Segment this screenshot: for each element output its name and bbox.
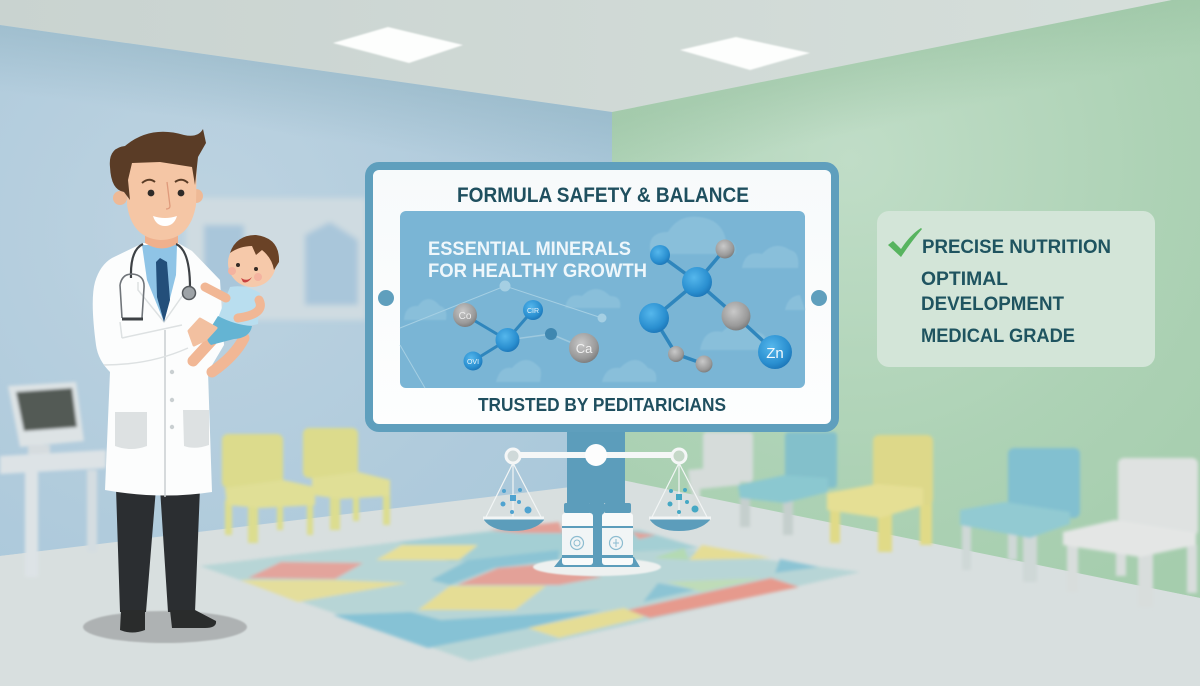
podium ellipse	[533, 558, 661, 576]
molecule left: OVI	[467, 359, 479, 366]
bottle left	[562, 503, 593, 565]
doctor holding baby	[83, 129, 279, 643]
right pan	[649, 463, 711, 531]
shirt and tie	[142, 245, 177, 322]
screen heading	[428, 238, 647, 282]
face	[127, 150, 197, 240]
molecule right: Zn	[766, 345, 784, 362]
molecule left: Ca	[576, 341, 593, 356]
benefits panel	[877, 211, 1155, 367]
panel background	[877, 211, 1155, 367]
wall art	[186, 198, 366, 320]
doctor hand	[189, 319, 216, 345]
balance scale with formula bottles	[483, 430, 711, 576]
monitor heading: FORMULA SAFETY & BALANCE	[457, 184, 749, 207]
monitor panel	[369, 166, 835, 428]
waiting room chairs	[222, 428, 1198, 607]
coat pockets	[115, 410, 209, 449]
molecule left: Co	[459, 311, 472, 322]
molecule left	[453, 300, 599, 370]
trousers	[116, 488, 200, 612]
baby shorts	[207, 316, 252, 345]
screen heading: ESSENTIAL MINERALS	[428, 238, 631, 260]
benefit text	[921, 236, 1111, 347]
baby arms	[205, 287, 260, 318]
left pan	[483, 463, 544, 531]
eyes and brows	[142, 180, 188, 209]
monitor stand	[554, 430, 640, 567]
neck	[145, 226, 178, 248]
computer desk	[0, 382, 106, 577]
molecule right	[639, 240, 792, 372]
ceiling lights	[333, 27, 810, 70]
colourful geometric rug	[200, 522, 860, 661]
monitor footer text: TRUSTED BY PEDITARICIANS	[478, 394, 726, 415]
benefit text: OPTIMAL	[921, 268, 1008, 290]
molecule left: CIR	[527, 308, 539, 315]
monitor frame	[369, 166, 835, 428]
benefit text: DEVELOPMENT	[921, 293, 1064, 315]
scale beam	[506, 444, 686, 466]
smile	[153, 216, 177, 226]
benefit text: PRECISE NUTRITION	[922, 236, 1111, 258]
floor shadow	[83, 611, 247, 643]
baby	[193, 235, 279, 372]
screen heading: FOR HEALTHY GROWTH	[428, 260, 647, 282]
faint network lines	[400, 280, 606, 388]
baby shirt	[218, 286, 260, 326]
lab coat	[93, 243, 224, 496]
monitor side dots	[378, 290, 827, 306]
baby head	[228, 235, 279, 287]
benefit text: MEDICAL GRADE	[921, 325, 1075, 347]
bottle right	[602, 503, 633, 565]
clouds	[404, 217, 805, 382]
mineral screen	[400, 211, 805, 388]
coat seam and buttons	[104, 282, 190, 497]
stethoscope	[120, 244, 196, 319]
shoes	[120, 610, 216, 632]
icon: green check	[888, 228, 922, 257]
hair	[110, 129, 206, 200]
baby legs	[193, 338, 244, 372]
ears	[113, 189, 203, 205]
